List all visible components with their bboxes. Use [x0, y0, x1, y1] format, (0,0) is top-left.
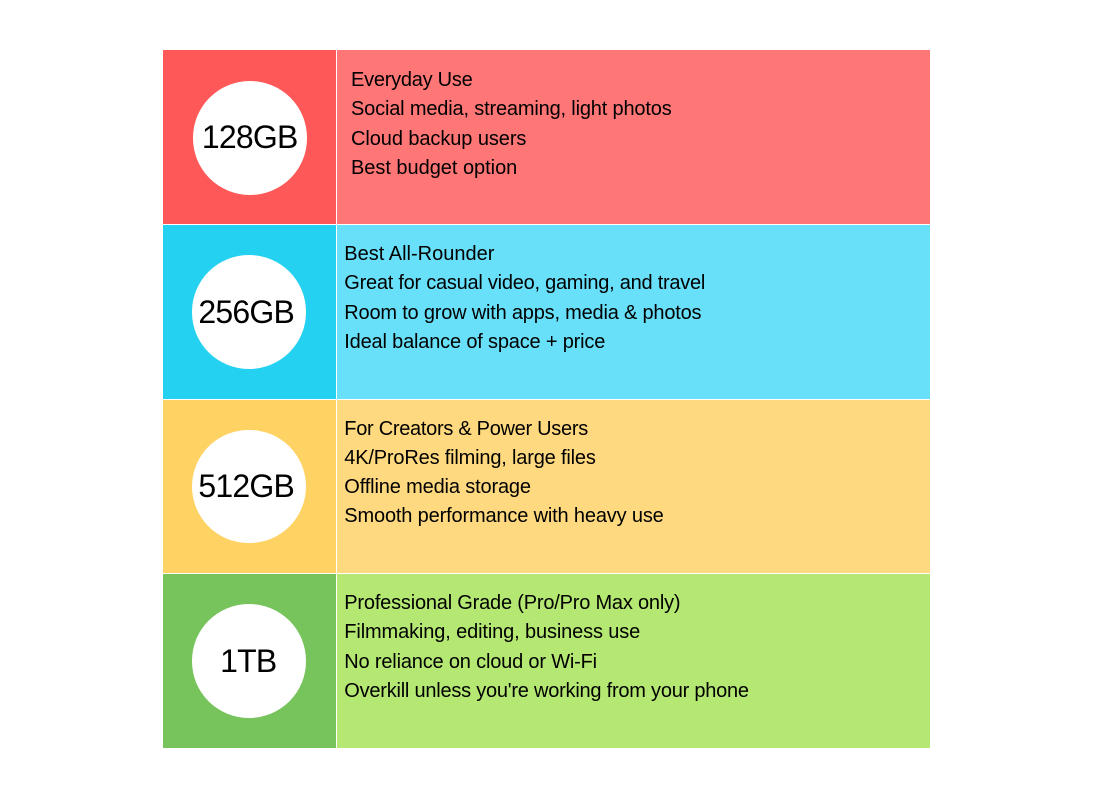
panel: 256GB row — [163, 225, 930, 399]
text: 1TB uses: Overkill unless you're working from your phone — [344, 680, 749, 702]
badge: 128GB: 128GB — [202, 119, 298, 155]
text: 512GB uses: 4K/ProRes filming, large files — [344, 447, 596, 469]
text: 1TB uses: No reliance on cloud or Wi-Fi — [344, 651, 597, 673]
label cell: 512GB — [163, 400, 336, 573]
badge: 512GB: 512GB — [198, 468, 294, 504]
description cell: 512GB — [337, 400, 930, 573]
text: 1TB uses — [344, 592, 749, 702]
badge: 512GB — [192, 430, 306, 543]
text: 128GB uses: Cloud backup users — [351, 128, 526, 150]
description cell: 1TB — [337, 574, 930, 748]
text: 256GB uses: Room to grow with apps, media & photos — [344, 302, 701, 324]
text: 512GB uses: Smooth performance with heavy use — [344, 505, 664, 527]
text: 1TB uses: Filmmaking, editing, business use — [344, 621, 640, 643]
badge: 1TB: 1TB — [220, 643, 276, 679]
panel: 1TB row — [163, 574, 930, 748]
text: 128GB uses — [351, 69, 672, 179]
text: 256GB uses: Great for casual video, gaming, and travel — [344, 272, 705, 294]
badge: 1TB — [192, 604, 306, 718]
label cell: 128GB — [163, 50, 336, 224]
panel: 512GB row — [163, 400, 930, 573]
badge: 256GB: 256GB — [198, 294, 294, 330]
text: 128GB uses: Social media, streaming, light photos — [351, 98, 672, 120]
badge: 256GB — [192, 255, 306, 368]
text: 128GB uses: Everyday Use — [351, 69, 472, 91]
description cell: 256GB — [337, 225, 930, 399]
text: 256GB uses: Ideal balance of space + price — [344, 331, 605, 353]
label cell: 1TB — [163, 574, 336, 748]
label cell: 256GB — [163, 225, 336, 399]
badge: 128GB — [193, 81, 306, 194]
description cell: 128GB — [337, 50, 930, 224]
text: 256GB uses: Best All-Rounder — [344, 243, 494, 265]
text: 1TB uses: Professional Grade (Pro/Pro Max only) — [344, 592, 680, 614]
text: 512GB uses: For Creators & Power Users — [344, 418, 588, 440]
text: 256GB uses — [344, 243, 705, 353]
text: 512GB uses: Offline media storage — [344, 476, 531, 498]
text: 512GB uses — [344, 418, 664, 527]
panel: 128GB row — [163, 50, 930, 224]
text: 128GB uses: Best budget option — [351, 157, 517, 179]
